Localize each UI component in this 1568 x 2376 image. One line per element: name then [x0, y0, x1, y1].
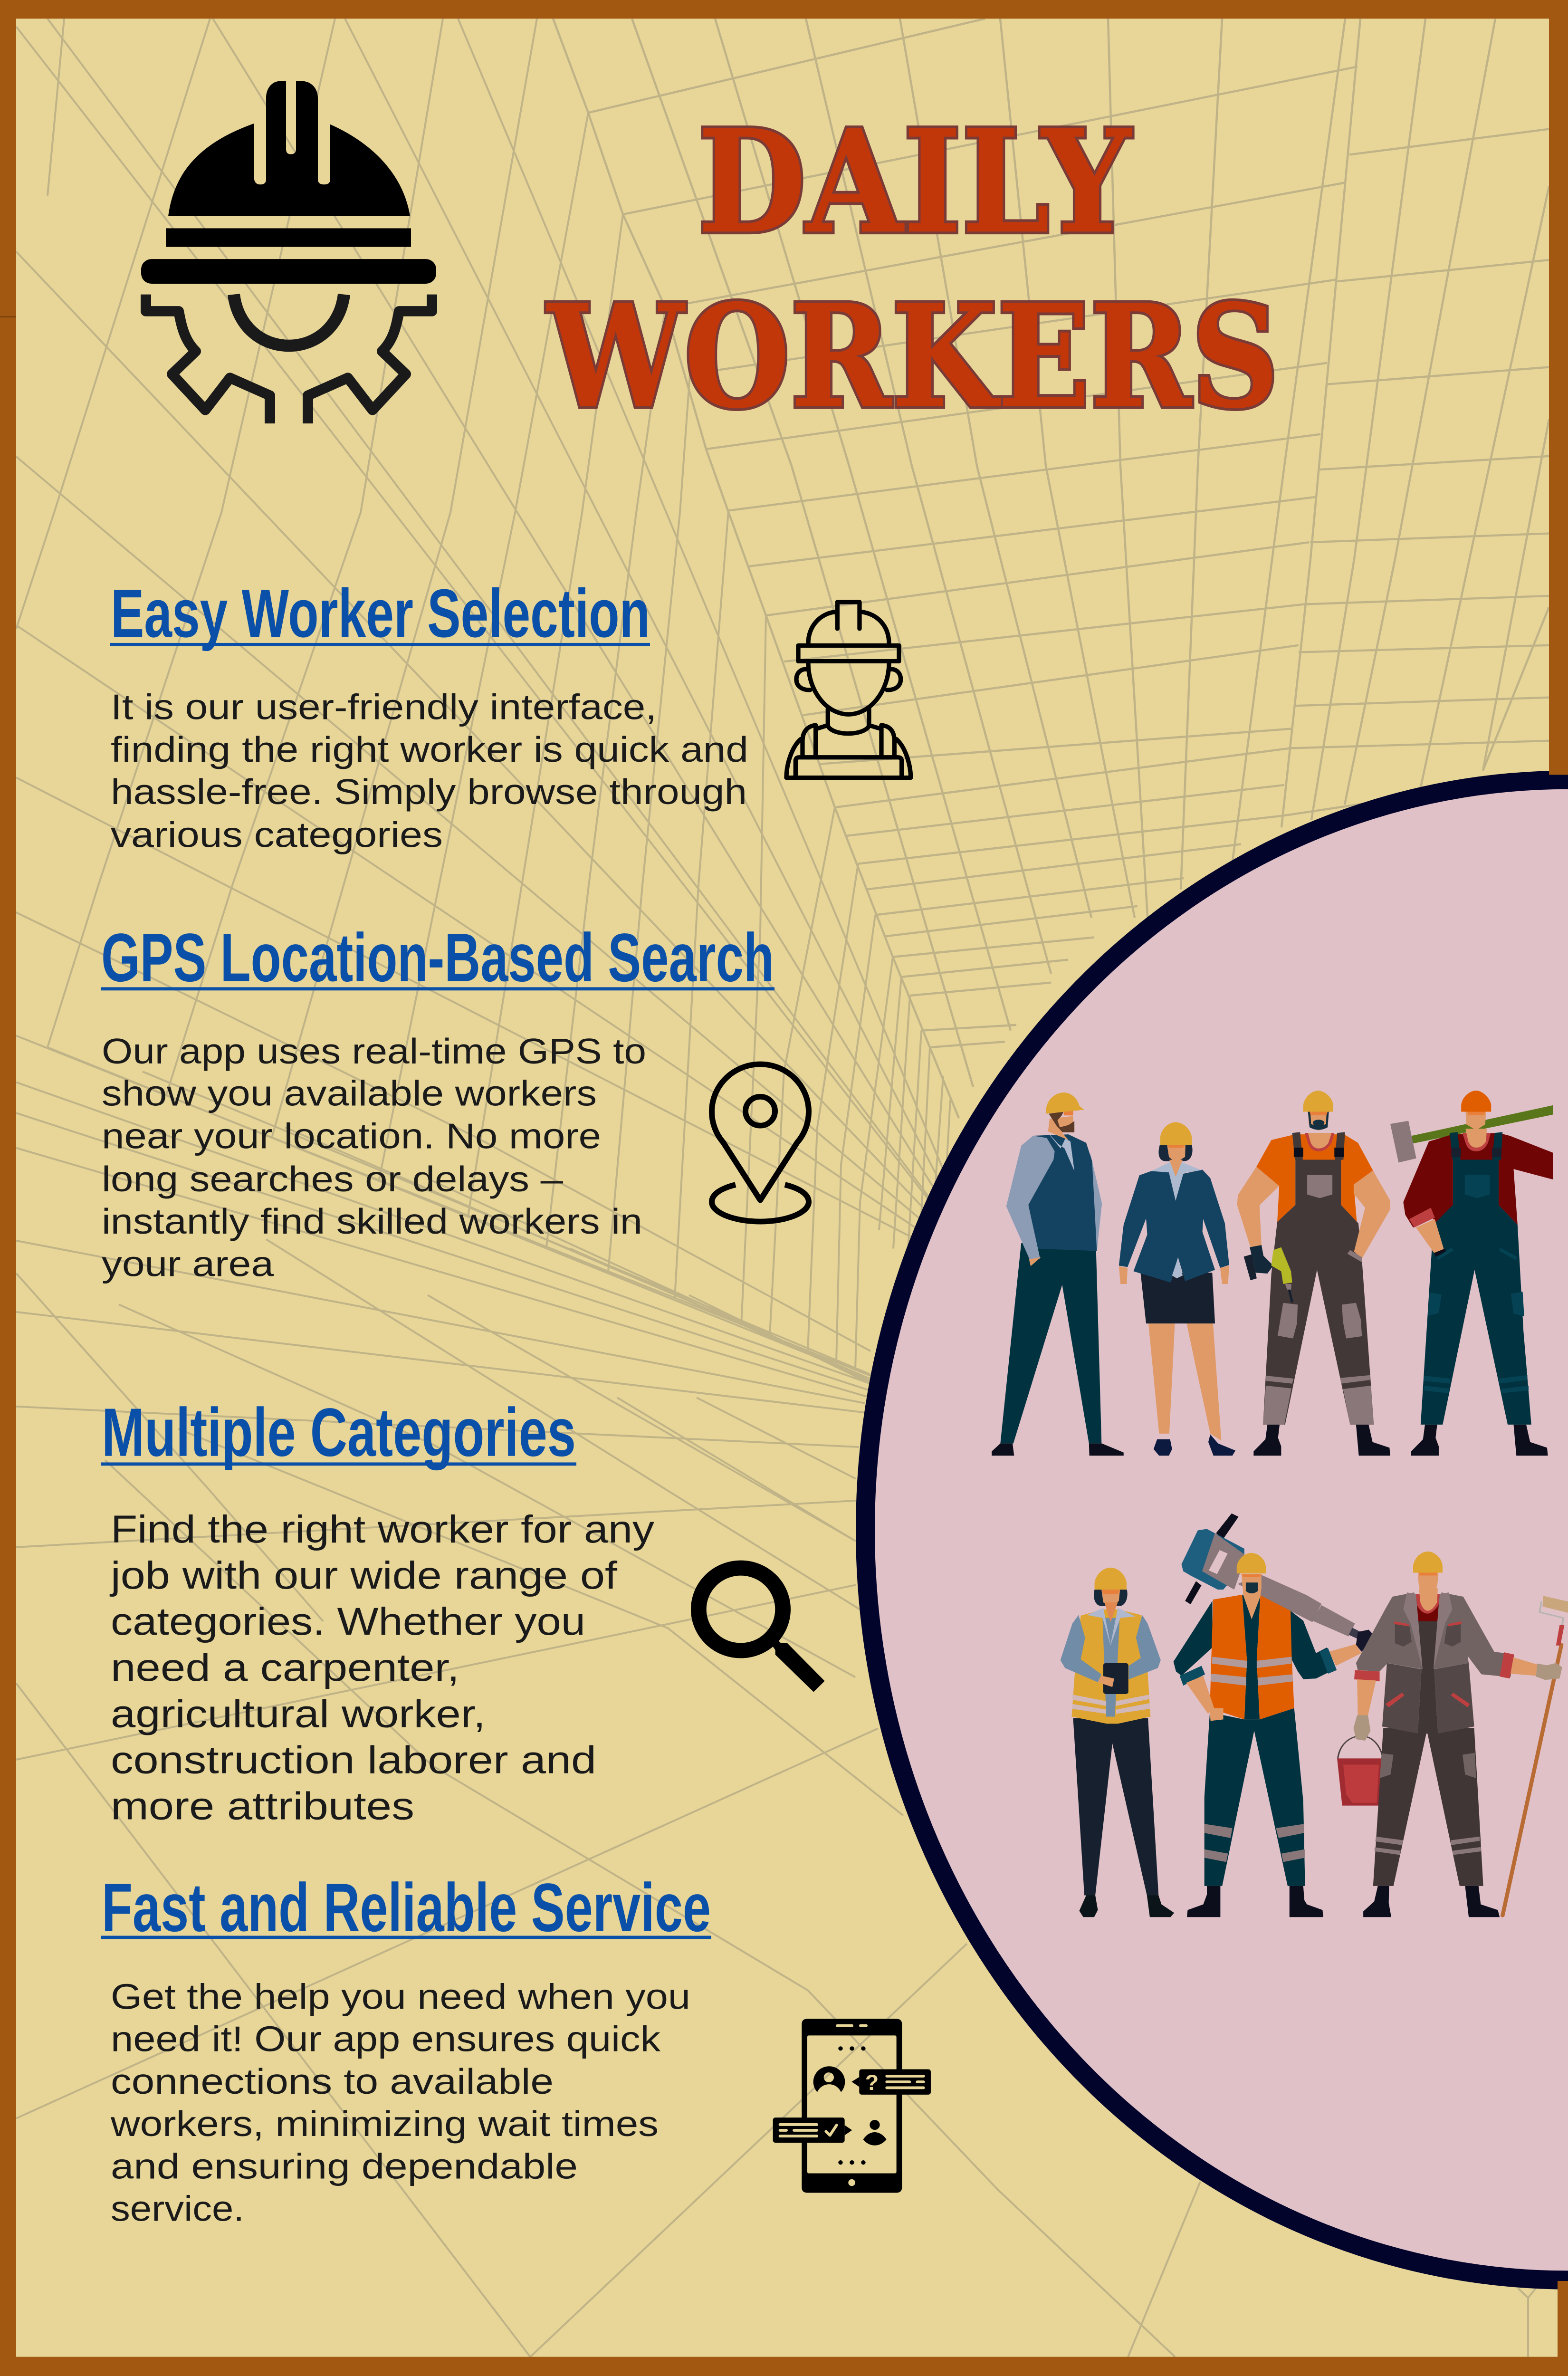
icon: worker outline: [786, 602, 911, 778]
text: fast service body: connections to available: [111, 2062, 554, 2102]
text: gps search body: show you available workers: [102, 1073, 597, 1113]
text: multiple categories body: job with our wide range of: [110, 1554, 617, 1597]
text: multiple categories body: Find the right worker for any: [111, 1508, 654, 1551]
text: easy worker selection body: finding the right worker is quick and: [111, 730, 748, 770]
text: gps search body: instantly find skilled workers in: [102, 1202, 642, 1242]
text: easy worker selection body: hassle-free. Simply browse through: [111, 772, 747, 812]
illustration: group of four workers: [992, 1091, 1553, 1456]
hat brim band: [166, 228, 411, 247]
gear outline: [146, 295, 432, 423]
worker: man in grey overalls with drill: [1237, 1091, 1390, 1456]
text: multiple categories body: agricultural worker,: [111, 1693, 486, 1735]
text: multiple categories body: more attributes: [111, 1785, 414, 1828]
worker: woman in blazer: [1119, 1122, 1235, 1456]
title: [545, 98, 1279, 440]
icon: magnifying glass: [698, 1568, 825, 1692]
worker: painter with bucket and roller: [1337, 1552, 1568, 1917]
visor: [141, 259, 436, 284]
text: fast service body: need it! Our app ensures quick: [111, 2019, 661, 2059]
text: multiple categories body: construction laborer and: [111, 1739, 596, 1782]
text: fast service body: workers, minimizing wait times: [110, 2104, 659, 2144]
worker: man in vest: [992, 1092, 1124, 1456]
text: gps search body: your area: [102, 1244, 274, 1284]
text: gps search body: near your location. No more: [102, 1116, 601, 1156]
text: gps search body: [102, 1032, 646, 1284]
hard hat dome: [168, 81, 410, 216]
worker: man with jackhammer: [1174, 1514, 1397, 1917]
section: easy worker selection heading: Easy Worker Selection: [111, 575, 650, 651]
section: multiple categories heading: Multiple Categories: [102, 1394, 576, 1470]
text: multiple categories body: need a carpenter,: [111, 1647, 459, 1689]
text: easy worker selection body: [111, 687, 748, 855]
text: fast service body: [110, 1977, 690, 2229]
icon: map pin: [712, 1064, 809, 1222]
text: fast service body: and ensuring dependable: [111, 2146, 578, 2186]
worker: woman with tablet: [1061, 1568, 1174, 1917]
title: WORKERS: [545, 273, 1279, 440]
text: easy worker selection body: It is our user-friendly interface,: [111, 687, 657, 728]
title: DAILY: [698, 98, 1133, 265]
icon: phone with chat bubbles: ?: [865, 2070, 879, 2095]
worker: man with sledgehammer: [1390, 1091, 1553, 1456]
text: fast service body: Get the help you need when you: [111, 1977, 690, 2017]
text: gps search body: long searches or delays –: [102, 1159, 564, 1199]
panel: workers circle: [865, 780, 1568, 2280]
icon: phone with chat bubbles: [773, 2019, 931, 2193]
text: fast service body: service.: [111, 2189, 244, 2229]
text: easy worker selection body: various categories: [111, 815, 443, 855]
text: multiple categories body: categories. Whether you: [111, 1600, 585, 1643]
text: gps search body: Our app uses real-time GPS to: [102, 1032, 646, 1072]
text: multiple categories body: [110, 1508, 654, 1828]
icon: hard hat and gear logo: [141, 81, 436, 423]
section: gps search heading: GPS Location-Based Search: [101, 919, 774, 996]
section: fast service heading: Fast and Reliable Service: [102, 1869, 711, 1945]
illustration: group of three workers: [1061, 1514, 1568, 1917]
